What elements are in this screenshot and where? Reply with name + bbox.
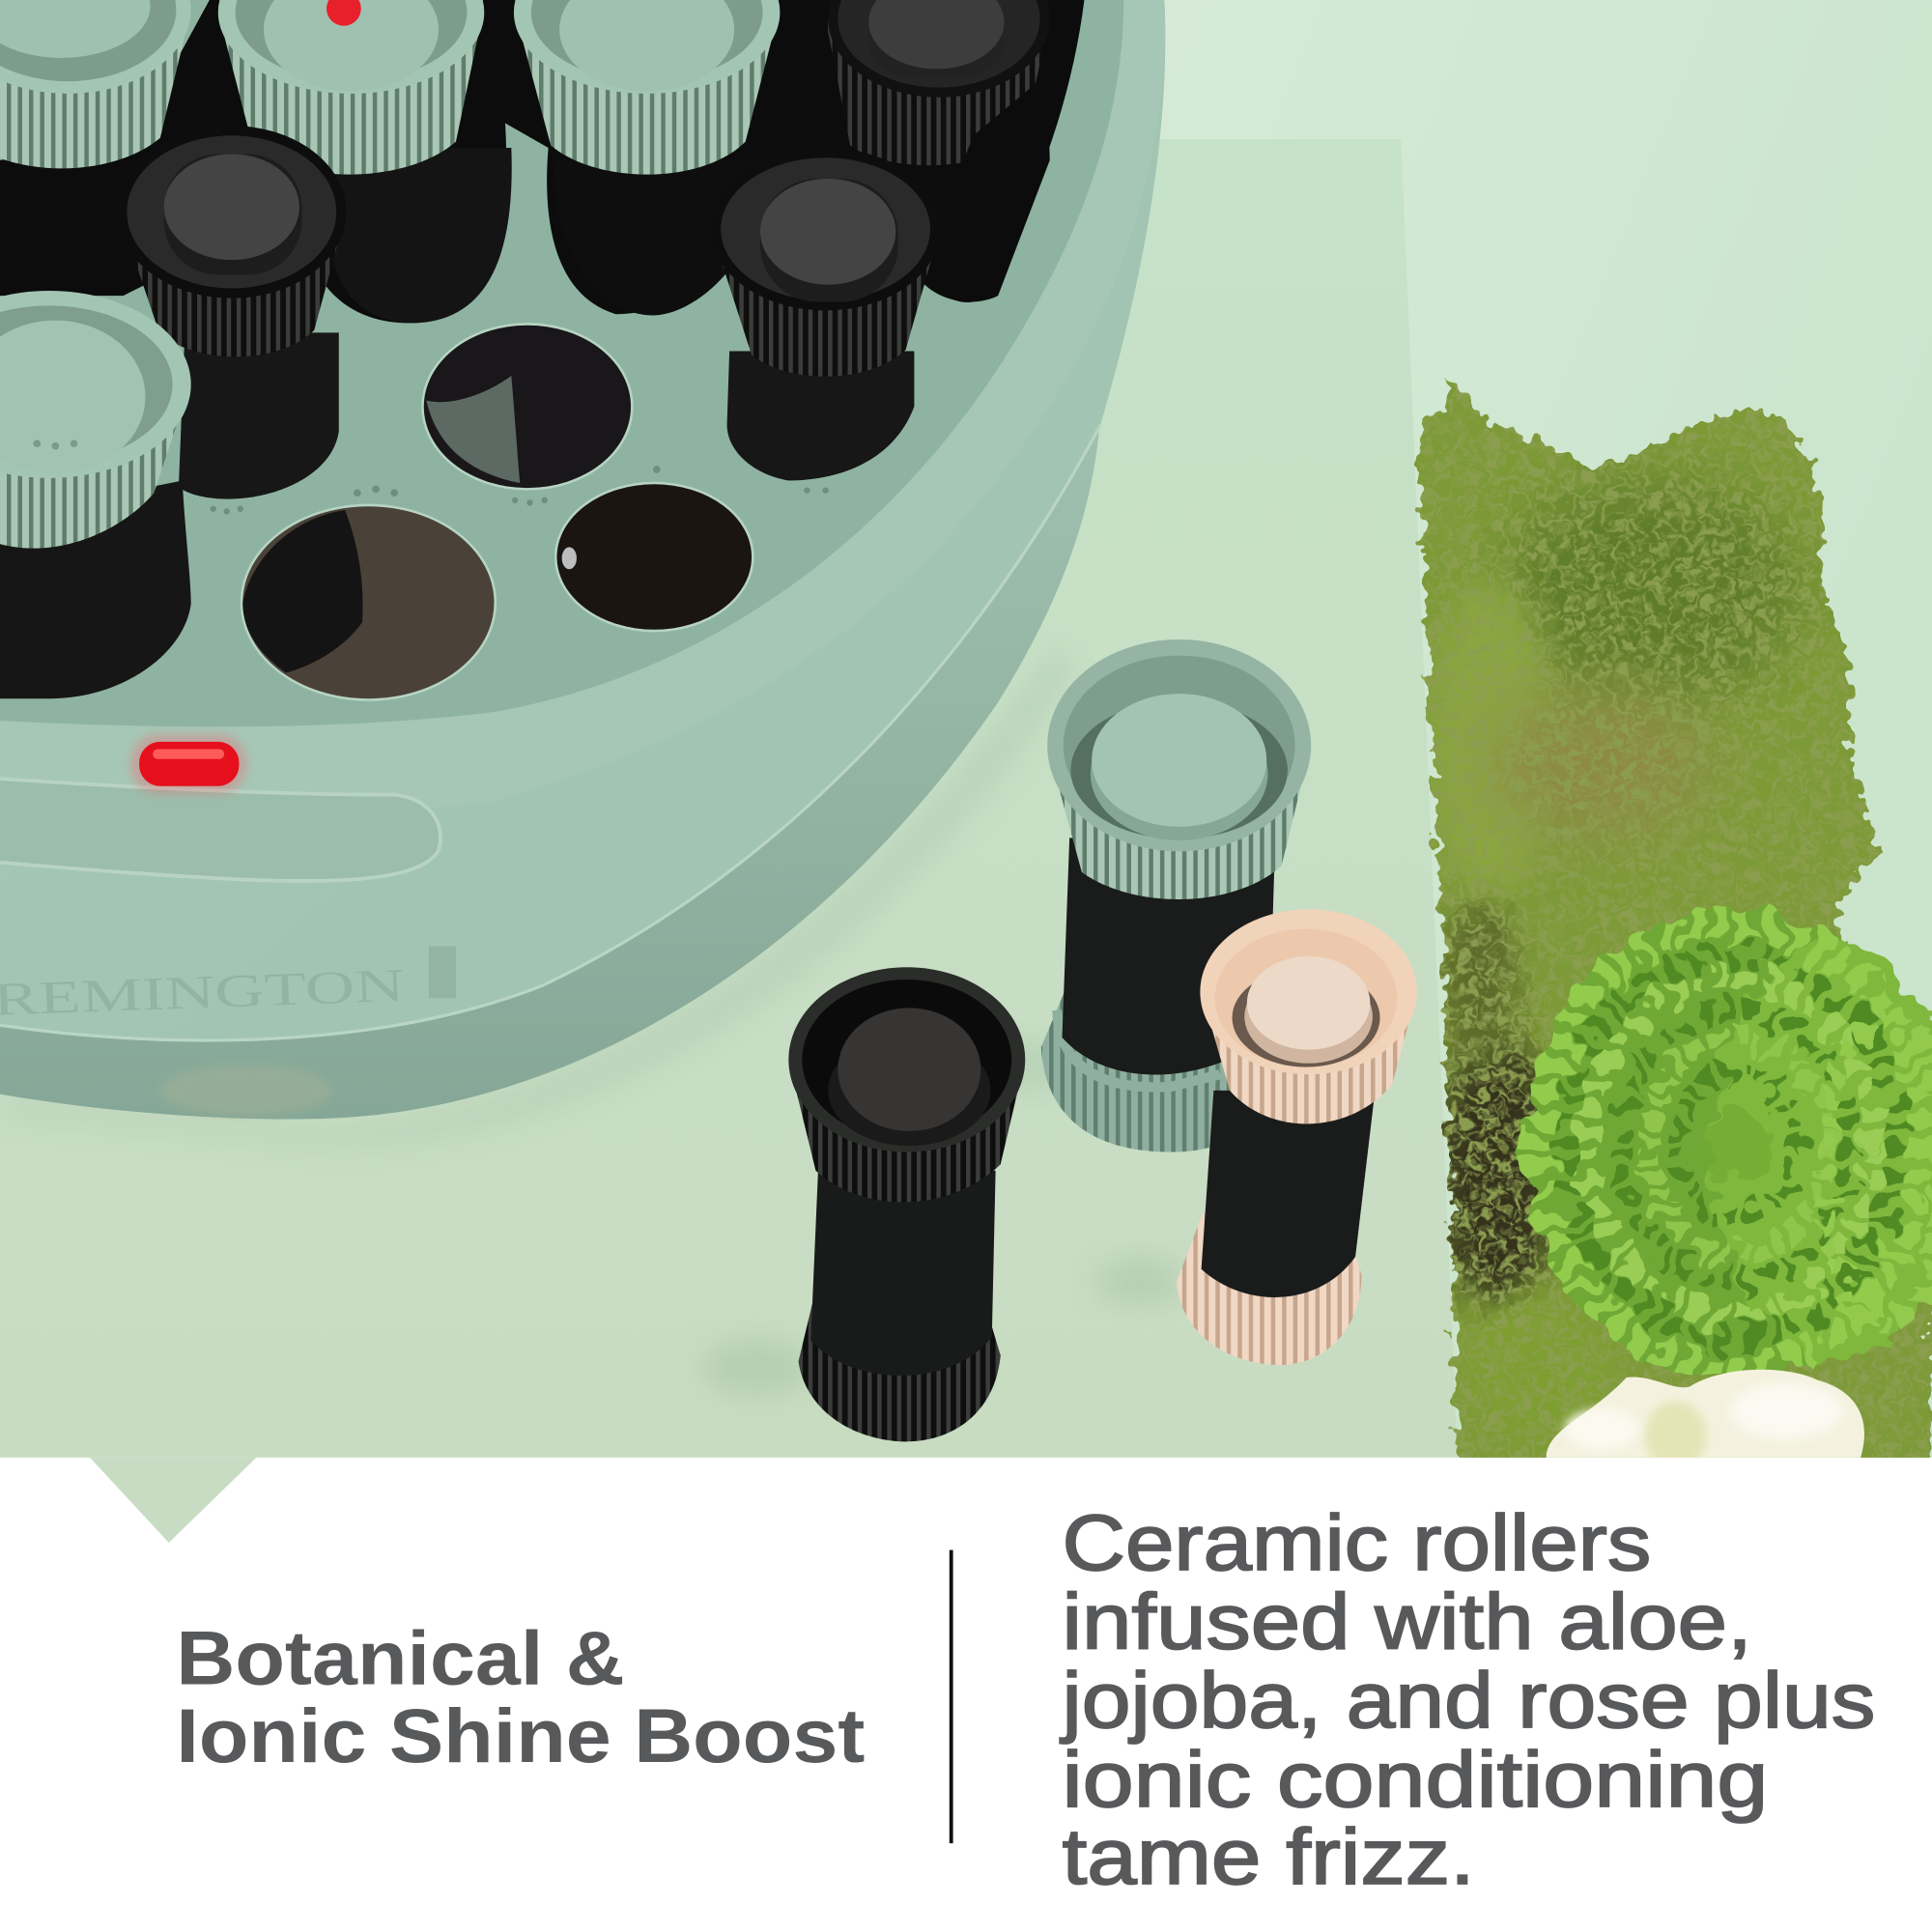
description text: Ceramic rollers (1062, 1499, 1651, 1587)
roller: dark top right (826, 0, 1050, 165)
description text: infused with aloe, (1062, 1578, 1752, 1666)
botanical print (160, 1065, 332, 1115)
brand bar (429, 947, 456, 998)
ribbed base (1177, 1213, 1361, 1365)
description text: tame frizz. (1062, 1813, 1475, 1901)
red dot (327, 0, 361, 26)
divider (950, 1550, 953, 1843)
roller: sage with red dot (218, 0, 512, 323)
heading: Botanical & (176, 1615, 625, 1701)
ribbed collar (788, 1060, 1025, 1202)
description text (1060, 1499, 1875, 1901)
ribbed base (1041, 980, 1275, 1152)
roller: sage lower left (0, 291, 191, 698)
ribbed base (799, 1300, 1001, 1441)
heading: Ionic Shine Boost (176, 1692, 865, 1778)
foam body (1062, 838, 1275, 1074)
handle groove (0, 779, 440, 881)
tray dimples (210, 466, 829, 515)
roller: sage top left (0, 0, 191, 168)
description text: jojoba, and rose plus (1060, 1657, 1875, 1745)
ribbed collar (1047, 746, 1311, 899)
appliance outer rim (0, 0, 1165, 811)
hair roller heating appliance (0, 0, 1165, 1120)
ribbed collar (1202, 992, 1417, 1123)
foam body (810, 1171, 996, 1376)
moss decoration (1405, 370, 1932, 1466)
empty hole left (241, 504, 497, 701)
table surface (0, 139, 1458, 1458)
empty hole middle (554, 482, 754, 632)
roller: dark left (117, 126, 346, 499)
white caption panel (0, 1458, 1932, 1932)
loose sage roller (955, 639, 1311, 1152)
empty hole upper (421, 323, 634, 491)
foam body (1202, 1091, 1375, 1297)
heading (176, 1615, 865, 1778)
loose black roller (702, 967, 1025, 1441)
loose peach roller (1096, 909, 1417, 1365)
white flower (1547, 1370, 1864, 1470)
shadow under appliance (0, 640, 1072, 1146)
roller: dark centre right (711, 74, 1050, 480)
appliance base (0, 431, 1099, 1120)
background wall (0, 0, 1932, 1458)
appliance lid (0, 0, 1165, 1040)
power indicator light (130, 734, 246, 793)
roller: sage top centre (514, 0, 780, 316)
brand wordmark: REMINGTON (0, 960, 405, 1026)
dark roller wells (0, 0, 1084, 323)
chrysanthemum flower (1524, 909, 1932, 1382)
description text: ionic conditioning (1062, 1736, 1768, 1824)
pointer triangle (90, 1458, 256, 1543)
